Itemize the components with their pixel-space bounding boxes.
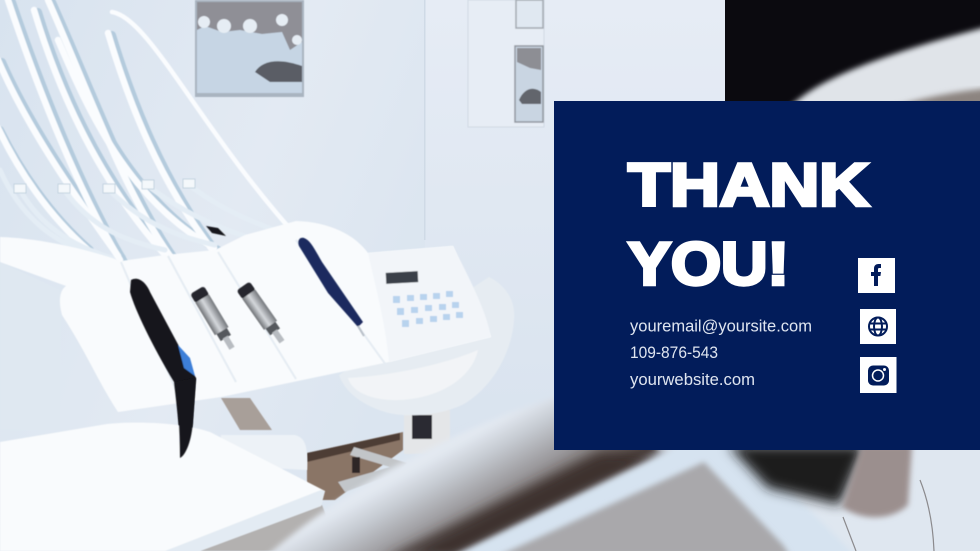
dark background top right [725, 0, 980, 112]
contact details [630, 318, 812, 389]
contact details: youremail@yoursite.com [630, 318, 812, 336]
blurred foreground chair [262, 396, 980, 551]
framed picture on wall [195, 0, 304, 97]
contact details: 109-876-543 [630, 344, 718, 362]
contact details: yourwebsite.com [630, 371, 755, 389]
heading: thank you: YOU! [628, 230, 789, 298]
handpiece: silver drill two [236, 281, 289, 346]
floor and baseboard [307, 432, 407, 500]
panel: thank you card [554, 101, 980, 450]
handpiece: black curing light [130, 279, 196, 458]
heading: thank you: THANK [628, 152, 869, 218]
icon: instagram [860, 357, 896, 393]
heading: thank you [628, 152, 869, 298]
icon: globe [860, 309, 896, 344]
handpiece: silver drill one [190, 286, 239, 352]
handpiece: blue scaler [298, 238, 364, 336]
mirror with small frames [468, 0, 544, 127]
instrument tray console [0, 221, 491, 430]
redraw curing-light tip over tray [176, 378, 196, 458]
lower tray [0, 423, 340, 551]
hoses [0, 0, 300, 262]
icon: facebook [858, 258, 895, 293]
stool [339, 277, 514, 454]
control keypad [368, 246, 491, 362]
back wall [0, 0, 735, 551]
